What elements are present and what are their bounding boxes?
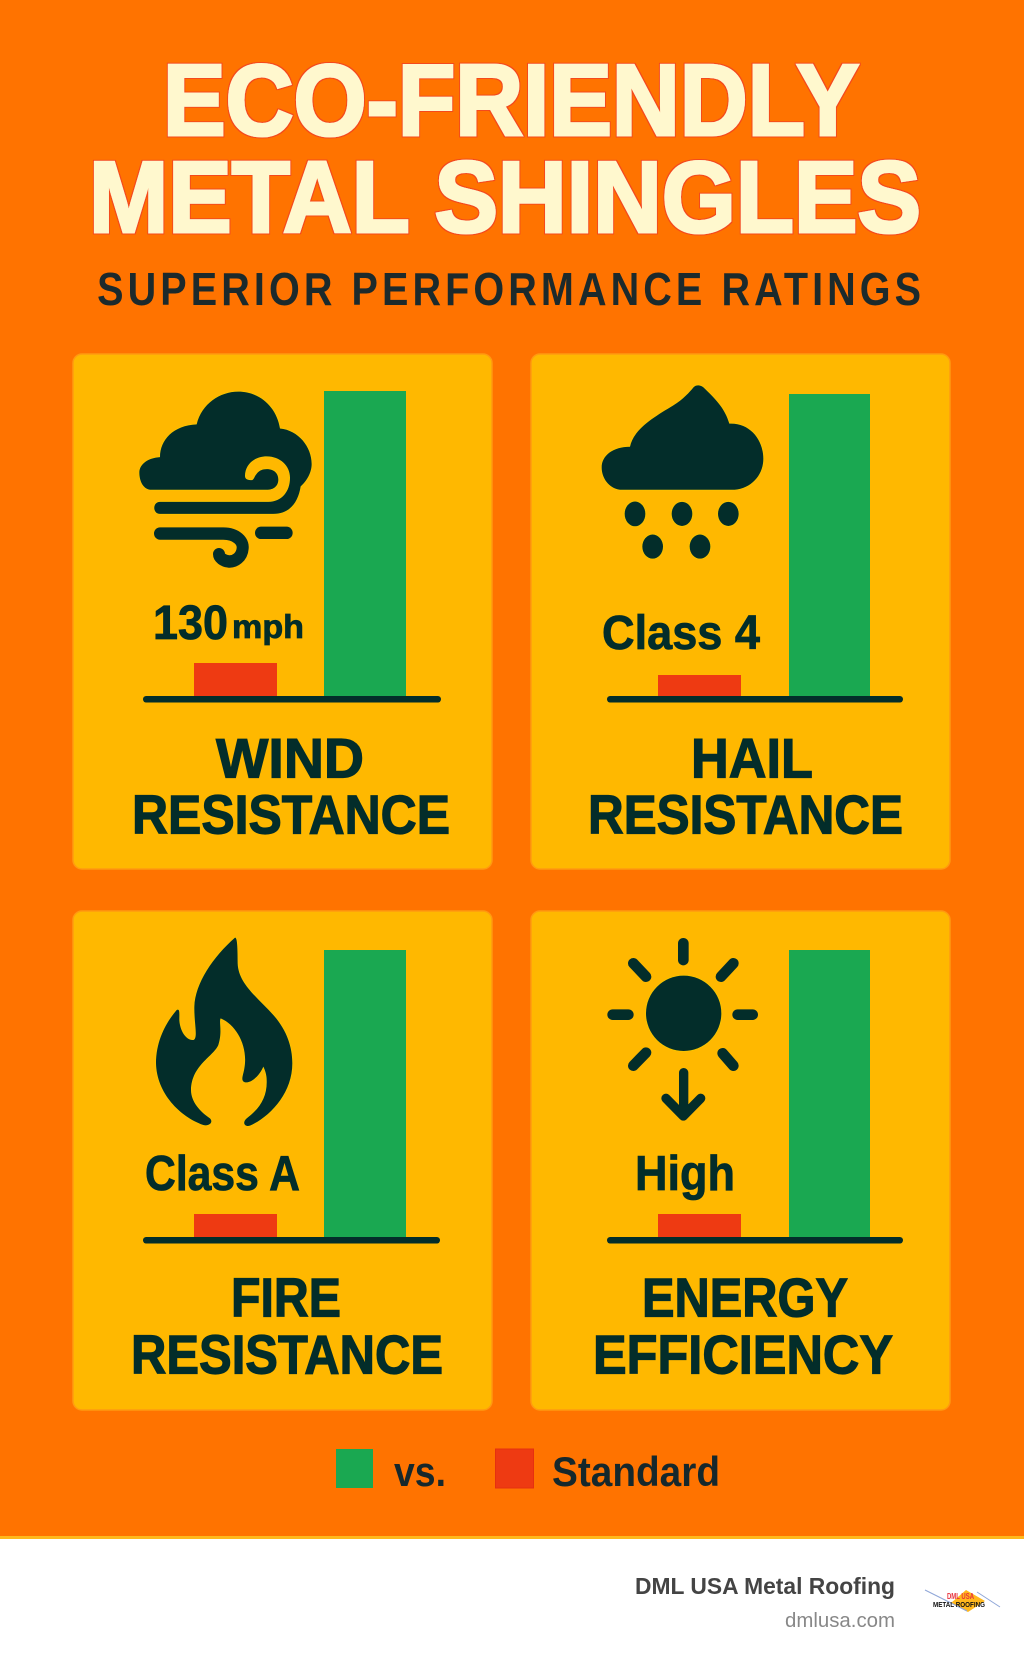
chart baseline [143,1237,440,1244]
icon: hail cloud [602,385,763,559]
metal shingles bar [789,950,870,1237]
chart baseline [607,696,903,702]
icon: flame [156,938,292,1126]
title: METAL SHINGLES [89,142,921,254]
panel heading: RESISTANCE [132,784,450,846]
legend text: vs.: vs. [394,1448,446,1495]
card background [531,911,950,1410]
legend swatch: red [496,1449,534,1488]
logo [925,1590,1000,1612]
standard bar [658,1214,741,1237]
icon: wind cloud [139,392,312,561]
value label: Class A: Class A [145,1147,300,1201]
title: ECO-FRIENDLY [163,45,859,157]
value label: Class 4: Class 4 [602,607,760,660]
metal shingles bar [324,391,406,696]
metal shingles bar [324,950,406,1237]
panel: wind resistance [73,354,492,869]
chart baseline [143,696,441,702]
logo: METAL ROOFING [933,1600,985,1609]
panel: fire resistance [73,911,492,1410]
standard bar [194,1214,277,1237]
card background [73,354,492,869]
title [89,45,921,254]
logo: DML USA [947,1592,974,1601]
value label: 130 mph: mph [232,608,304,645]
panel heading [593,1266,893,1386]
panel heading [132,726,450,846]
footer strip [0,1536,1024,1666]
value label: 130 mph: 130 [153,597,228,650]
subtitle: SUPERIOR PERFORMANCE RATINGS [97,264,921,316]
value label: 130 mph [153,597,304,650]
standard bar [194,663,277,696]
panel: energy efficiency [531,911,950,1410]
legend text: Standard: Standard [552,1448,720,1495]
card background [73,911,492,1410]
panel heading: RESISTANCE [131,1324,443,1386]
panel heading: HAIL [691,726,813,790]
metal shingles bar [789,394,870,696]
chart baseline [607,1237,903,1244]
legend swatch: green [336,1449,373,1488]
value label: High: High [635,1147,735,1201]
panel heading [131,1266,443,1386]
legend [336,1448,720,1495]
panel heading: WIND [216,726,364,790]
panel heading: ENERGY [642,1266,848,1328]
panel: hail resistance [531,354,950,869]
footer company name: DML USA Metal Roofing [635,1573,895,1599]
footer website: dmlusa.com [785,1610,895,1632]
panel heading: FIRE [231,1266,341,1328]
standard bar [658,675,741,696]
panel heading [588,726,903,846]
panel heading: EFFICIENCY [593,1324,893,1386]
icon: sun with down arrow [613,943,753,1116]
card background [531,354,950,869]
panel heading: RESISTANCE [588,784,903,846]
